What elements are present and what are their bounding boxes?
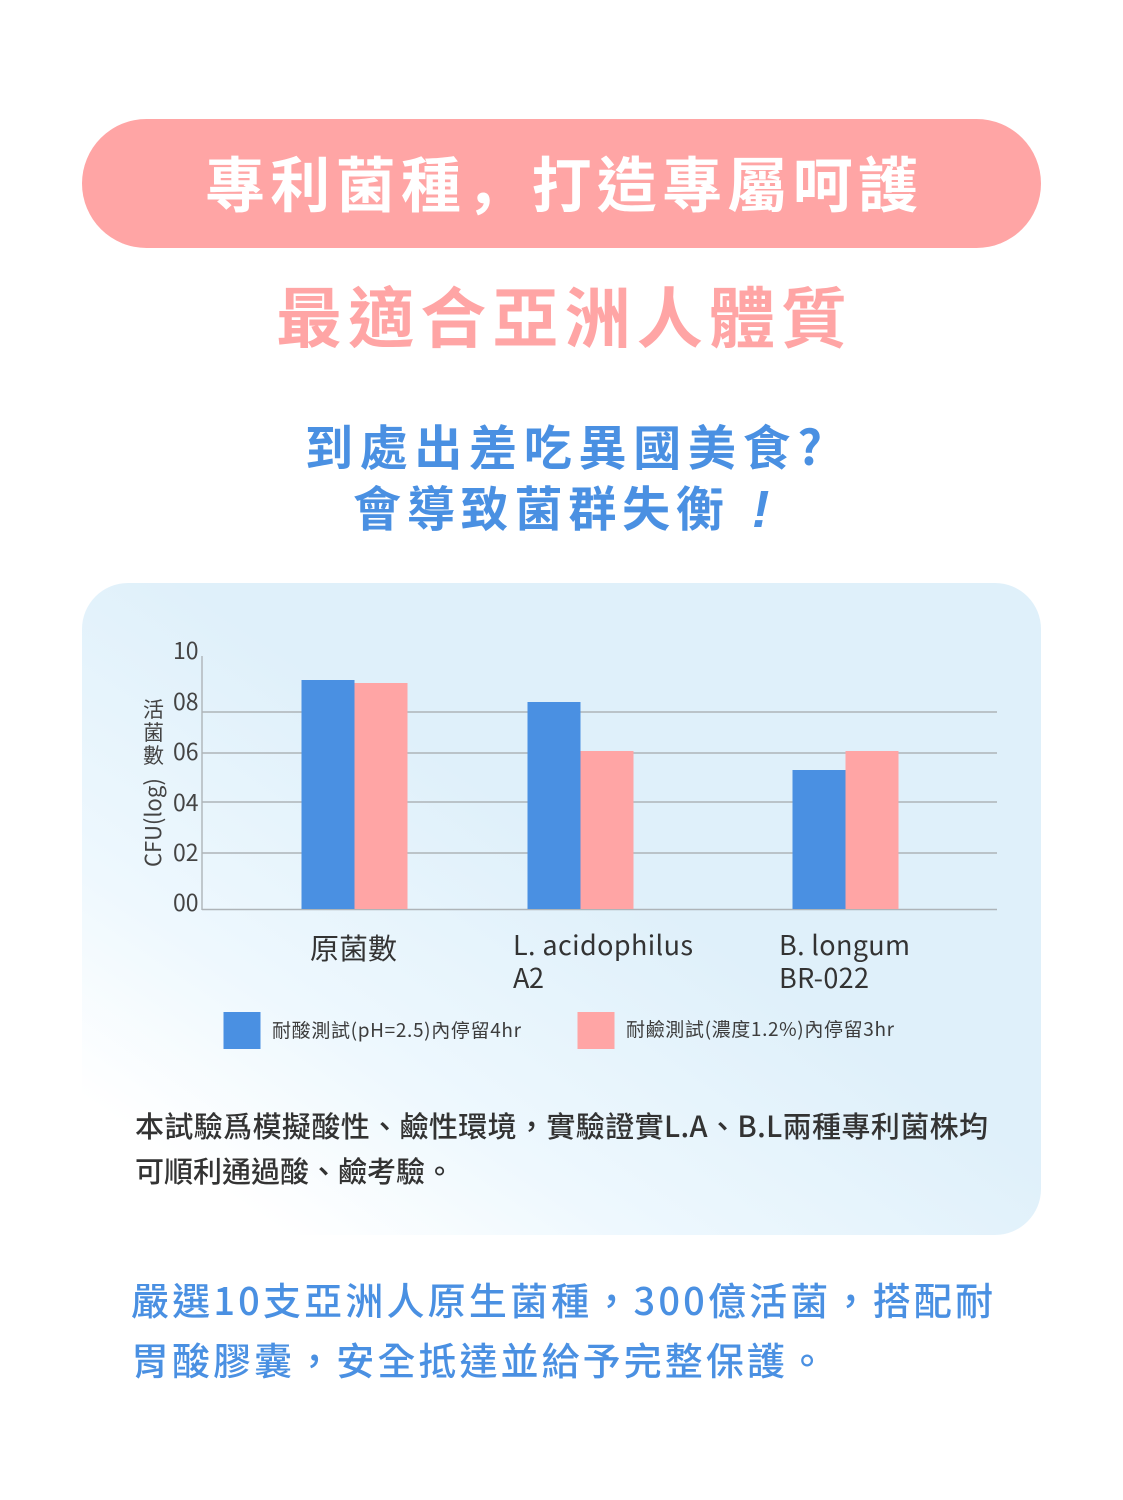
subtitle: pink: 最適合亞洲人體質	[276, 266, 847, 362]
x axis labels: B. longum	[779, 924, 910, 963]
x axis labels	[310, 924, 910, 996]
legend: 耐酸測試(pH=2.5)內停留4hr	[272, 1016, 522, 1043]
y axis labels: 02	[173, 834, 198, 868]
y axis title: 活	[143, 694, 164, 724]
footer text	[131, 1271, 993, 1386]
header banner	[82, 119, 1041, 248]
y axis labels: 04	[173, 784, 199, 818]
panel description: 可順利通過酸、鹼考驗。	[135, 1149, 454, 1191]
y axis labels: 08	[173, 683, 198, 717]
footer text: 胃酸膠囊，安全抵達並給予完整保護。	[131, 1331, 826, 1386]
y axis title	[136, 694, 168, 867]
y axis labels	[173, 632, 199, 918]
y axis labels: 00	[173, 884, 198, 918]
panel description: 本試驗爲模擬酸性、鹼性環境，實驗證實L.A、B.L兩種專利菌株均	[135, 1104, 988, 1146]
question heading: 會導致菌群失衡	[353, 470, 724, 540]
x axis labels: A2	[513, 957, 544, 996]
footer text: 嚴選10支亞洲人原生菌種，300億活菌，搭配耐	[131, 1271, 993, 1326]
y axis title: 菌	[143, 717, 164, 747]
bar chart	[202, 656, 997, 910]
x axis labels: L. acidophilus	[513, 924, 693, 963]
y axis title: 數	[143, 740, 164, 770]
x axis labels: 原菌數	[310, 926, 397, 968]
panel description	[135, 1104, 988, 1191]
question heading: 到處出差吃異國美食?	[305, 409, 822, 479]
question heading	[305, 409, 822, 540]
y axis title: CFU(log)	[136, 778, 168, 867]
question heading: !	[752, 481, 769, 539]
y axis labels: 10	[173, 632, 198, 666]
legend: 耐鹼測試(濃度1.2%)內停留3hr	[626, 1015, 895, 1042]
panel: chart background	[82, 583, 1041, 1235]
legend	[224, 1012, 895, 1049]
x axis labels: BR-022	[779, 957, 869, 996]
banner title: 專利菌種，打造專屬呵護	[205, 138, 918, 225]
y axis labels: 06	[173, 733, 198, 767]
